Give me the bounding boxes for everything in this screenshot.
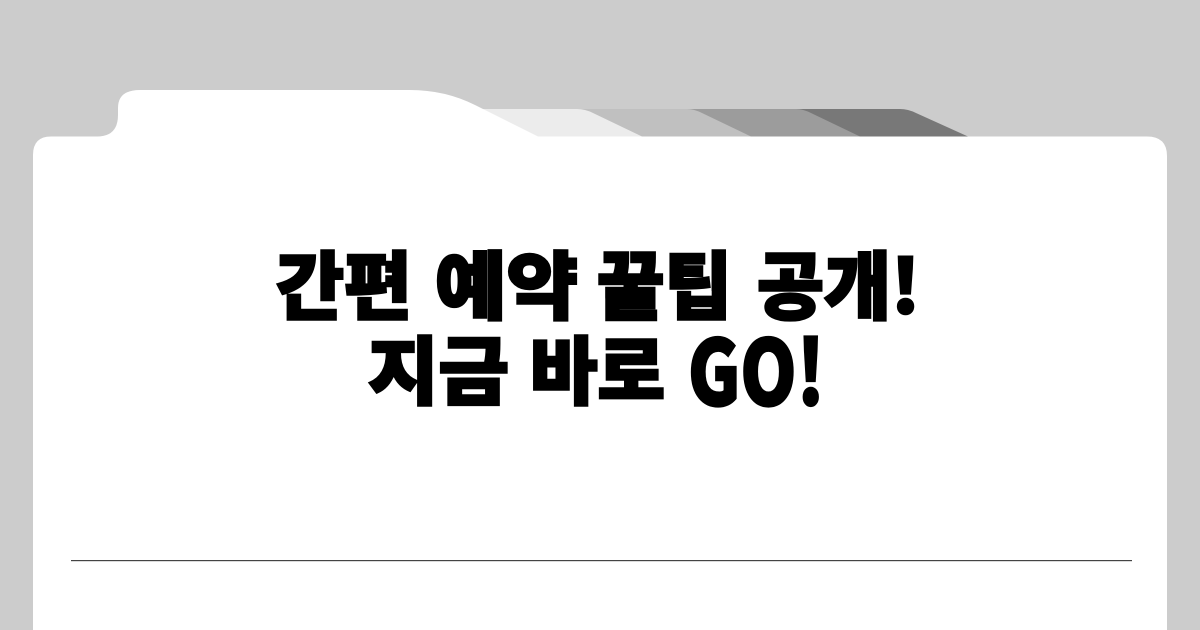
tab: light gray (470, 109, 642, 136)
tab: darkest (780, 109, 968, 136)
title line 1: 공개! (757, 228, 920, 335)
title line 2: GO! (688, 301, 825, 431)
title (276, 228, 920, 431)
title line 2: 지금 (368, 313, 509, 420)
title line 1: 꿀팁 (597, 228, 732, 335)
folder tabs (470, 109, 968, 136)
title line 2: 바로 (530, 313, 665, 420)
title line 1: 간편 (276, 228, 412, 335)
title line 1 (276, 228, 920, 335)
title line 2 (368, 301, 825, 431)
divider line (71, 560, 1132, 561)
title line 1: 예약 (435, 228, 578, 335)
tab: mid gray (560, 109, 751, 136)
tab: dark gray (670, 109, 860, 136)
